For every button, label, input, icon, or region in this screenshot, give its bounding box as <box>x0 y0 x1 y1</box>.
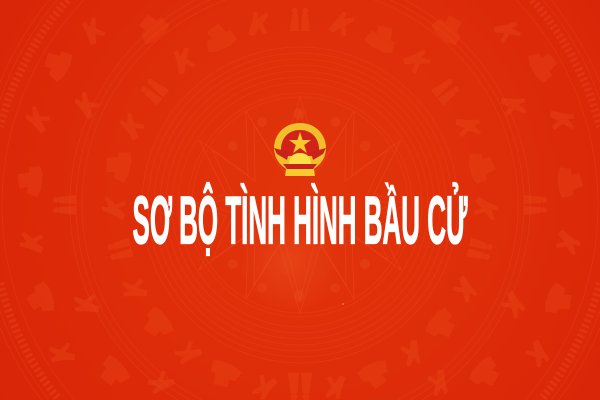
emblem ribbons <box>274 148 326 160</box>
national emblem <box>274 123 326 176</box>
star eye motifs <box>228 108 370 302</box>
emblem banner <box>285 169 315 176</box>
emblem star <box>289 132 311 153</box>
emblem gold disc <box>274 123 326 174</box>
central star <box>192 97 408 313</box>
light glow <box>220 205 380 315</box>
emblem red field <box>281 130 319 156</box>
inner figure band <box>102 8 498 400</box>
emblem cog <box>289 153 311 165</box>
